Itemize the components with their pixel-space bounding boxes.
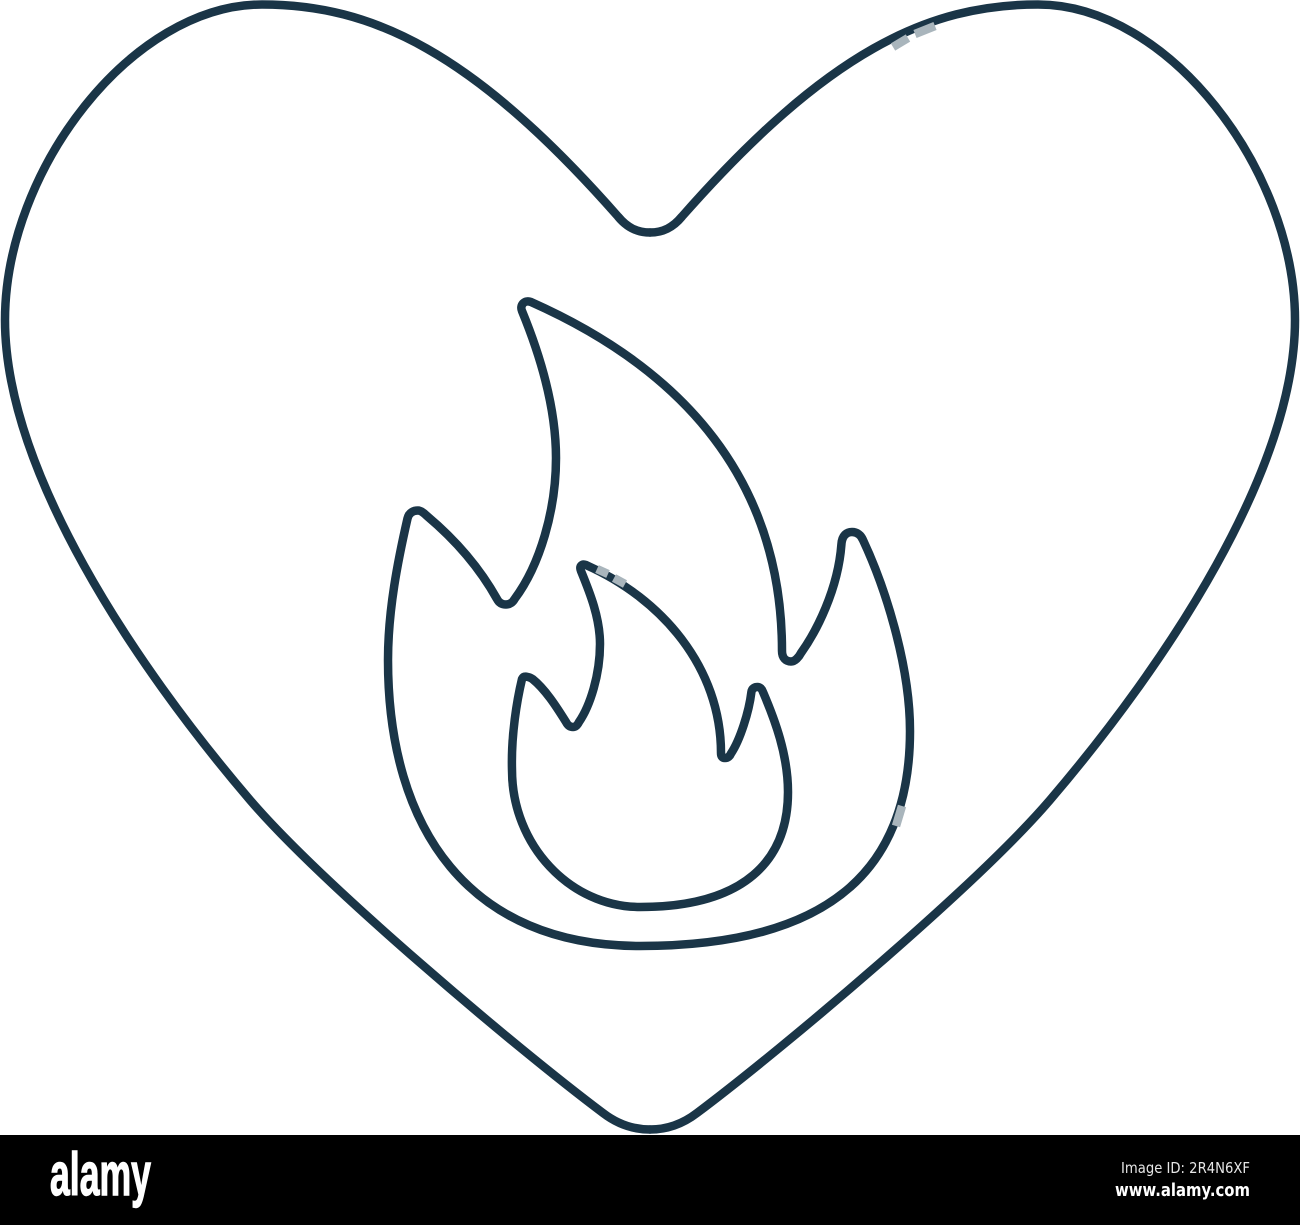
footer bar [0,1135,1300,1225]
icon: outer flame [388,301,910,946]
website url: www.alamy.com [1115,1181,1250,1201]
image id: Image ID: 2R4N6XF [1121,1159,1250,1177]
icon: inner flame [512,565,788,907]
logo: alamy: alamy [50,1141,151,1208]
